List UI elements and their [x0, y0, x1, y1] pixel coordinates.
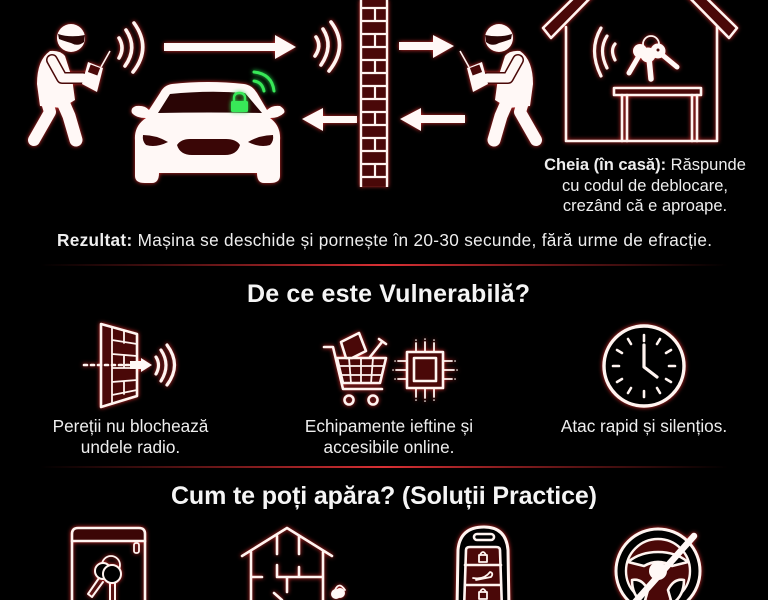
icon: house with keys on table: [543, 0, 737, 141]
icon: key fob: [457, 527, 509, 600]
heading: why vulnerable: De ce este Vulnerabilă?: [247, 280, 530, 308]
icon: thief with receiver, right: [460, 24, 536, 140]
text: result: Rezultat: Mașina se deschide și pornește în 20-30 secunde, fără urme de efracție.: [57, 230, 712, 250]
text: cheap equipment: [305, 416, 473, 457]
text: walls do not block: Pereții nu blochează: [53, 416, 209, 436]
heading: how to defend: Cum te poți apăra? (Soluții Practice): [171, 482, 597, 510]
text: walls do not block: [53, 416, 209, 457]
icon: faraday pouch with keys: [72, 528, 145, 600]
icon: white car: [132, 82, 284, 183]
icon: signal waves before wall: [315, 22, 340, 71]
icon: brick wall: [361, 0, 387, 187]
arrow: left to car: [302, 108, 357, 131]
text: cheap equipment: Echipamente ieftine și: [305, 416, 473, 436]
arrow: top relay to wall: [164, 35, 296, 59]
text: fast attack: Atac rapid și silențios.: [561, 416, 727, 436]
icon: house floor plan with keys: [242, 528, 345, 600]
icon: wall with signal passing through: [84, 324, 174, 407]
icon: steering wheel lock: [616, 529, 700, 600]
icon: shopping cart with equipment: [324, 333, 386, 404]
text: key explanation: Cheia (în casă): Răspunde: [544, 156, 746, 174]
icon: green lock and signal: [231, 72, 274, 112]
icon: microchip: [393, 339, 457, 401]
icon: clock: [604, 326, 684, 406]
icon: thief with transmitter, left: [34, 24, 110, 140]
text: key explanation: [544, 156, 746, 215]
icon: signal waves from thief: [119, 23, 143, 72]
arrow: right to second thief: [399, 35, 454, 58]
text: key explanation: crezând că e aproape.: [563, 197, 727, 215]
text: cheap equipment: accesibile online.: [324, 437, 454, 457]
arrow: left back to wall: [400, 108, 465, 131]
text: walls do not block: undele radio.: [81, 437, 180, 457]
text: key explanation: cu codul de deblocare,: [562, 177, 728, 195]
